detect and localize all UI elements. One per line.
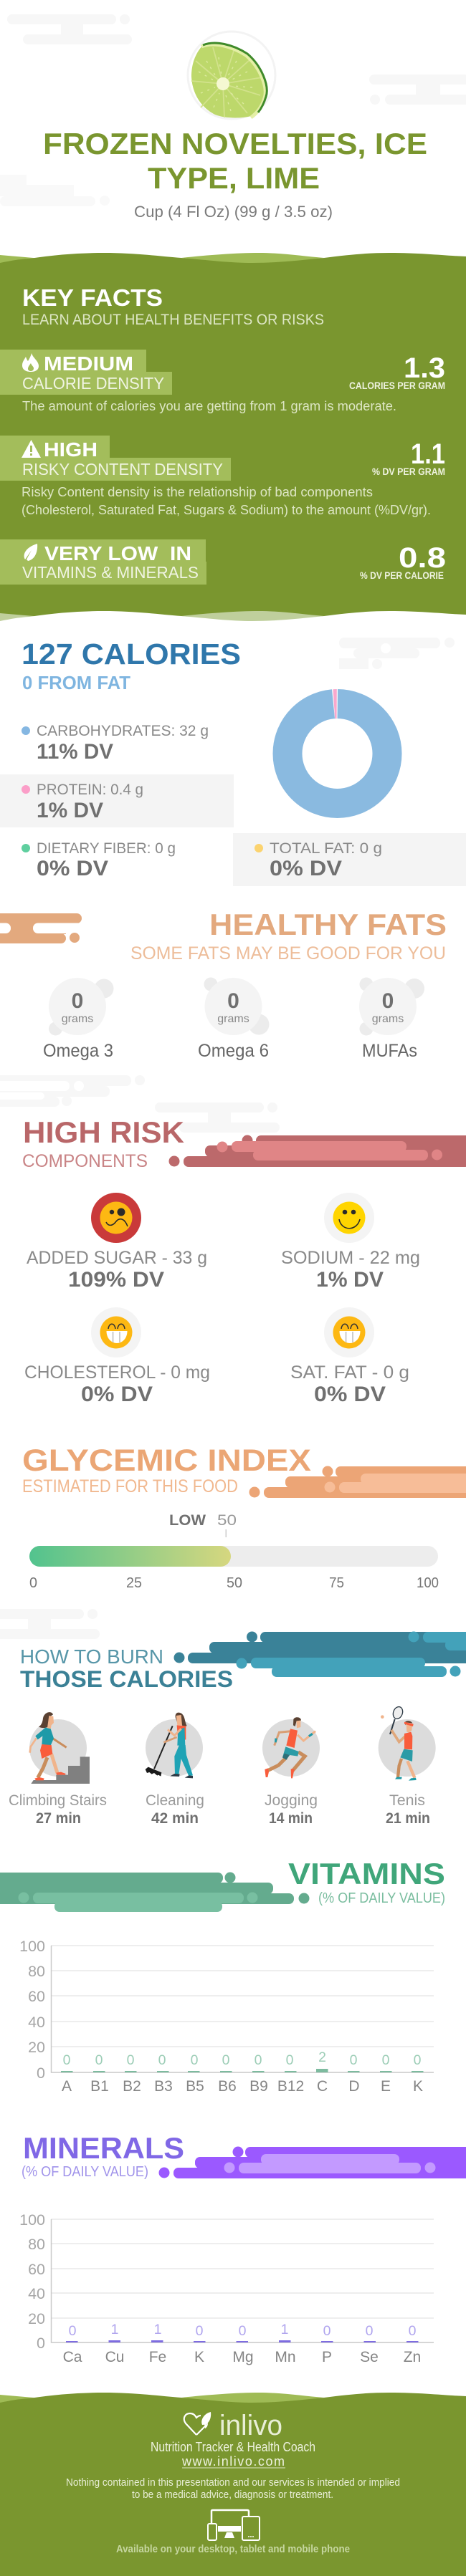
background cloud: calories [339,638,455,669]
risky content description: Risky Content density is the relationship of bad components [22,485,373,499]
bar values: 0 [222,2052,230,2068]
serving size: Cup (4 Fl Oz) (99 g / 3.5 oz) [134,203,333,221]
macro: total fat: 0% DV [270,857,342,880]
activity: cleaning: Cleaning [146,1792,204,1809]
y axis labels [19,1938,45,2082]
background cloud: top right [369,75,466,105]
fat: omega 3 [43,978,113,1061]
gauge label: 50 [217,1512,237,1529]
donut chart [287,689,387,804]
y axis labels [19,2211,45,2352]
calories heading: 127 CALORIES [22,638,241,671]
vitamins and minerals value: 0.8 [399,542,446,574]
y axis labels: 100 [19,1938,45,1955]
minerals subheading: (% OF DAILY VALUE) [22,2164,148,2180]
burn heading line 1: HOW TO BURN [20,1645,163,1668]
y axis labels: 20 [28,2310,45,2327]
title: FROZEN NOVELTIES, ICE [43,127,427,160]
y axis labels: 100 [19,2211,45,2229]
fat: mufas [359,977,424,1061]
x axis labels: B6 [218,2078,237,2095]
y axis labels: 40 [28,2285,45,2302]
fat: mufas: grams [372,1013,404,1025]
high label: HIGH [44,438,98,461]
gauge scale [29,1575,439,1591]
macro: protein [0,774,234,827]
vitamins and minerals badge [0,539,206,585]
fat: mufas: 0 [382,989,394,1013]
risky content value [372,438,445,477]
activity: climbing stairs: Climbing Stairs [9,1792,107,1809]
very low label: VERY LOW IN [44,542,191,564]
activity: jogging: Jogging [265,1792,318,1809]
vitamins and minerals value: % DV PER CALORIE [360,570,444,581]
macro: carbohydrates [22,723,209,764]
background cloud: top left [7,14,132,44]
website link: www.inlivo.com [181,2454,285,2469]
food image: lime slice [188,32,275,119]
vitamins and minerals value [360,542,446,581]
icon: flame [22,353,39,372]
x axis labels: B12 [277,2078,304,2095]
background clouds: high risk [0,1075,280,1133]
x axis labels: P [322,2349,332,2365]
gauge scale: 100 [417,1575,439,1591]
title [43,127,427,195]
calorie density label: CALORIE DENSITY [22,374,164,393]
fat: omega 3: grams [62,1013,93,1025]
logo wordmark: inlivo [219,2410,282,2441]
risk: sodium [281,1193,420,1292]
gauge label [169,1512,237,1537]
risky content description: (Cholesterol, Saturated Fat, Sugars & Sodium) to the amount (%DV/gr). [22,503,431,517]
icon: warning triangle [22,440,41,458]
bar values: 0 [69,2323,77,2339]
macro: dietary fiber [22,840,176,880]
vitamins heading: VITAMINS [288,1857,445,1890]
bar values: 1 [154,2322,161,2337]
bar values: 0 [255,2052,262,2068]
x axis labels: B9 [249,2078,268,2095]
burn heading line 2: THOSE CALORIES [20,1666,233,1692]
x axis labels: C [317,2078,328,2095]
availability note: Available on your desktop, tablet and mobile phone [116,2543,350,2555]
y axis labels: 60 [28,2261,45,2278]
x axis labels [62,2078,423,2095]
fat: omega 3: 0 [72,989,83,1013]
bar values: 0 [239,2323,247,2339]
icon: grinning face [333,1317,366,1348]
risk: added sugar: 109% DV [68,1268,164,1292]
x axis labels: Mg [232,2349,254,2365]
fat: omega 3: Omega 3 [43,1041,113,1061]
bar values: 0 [323,2323,331,2339]
macro: protein: PROTEIN: 0.4 g [37,782,143,798]
panel: footer [0,2393,466,2576]
bar values: 0 [196,2323,204,2339]
illustration: runner [262,1717,320,1778]
macro: carbohydrates: 11% DV [37,740,113,764]
illustration: tennis player [379,1706,436,1781]
macro: dietary fiber: DIETARY FIBER: 0 g [37,840,176,857]
fat: mufas: MUFAs [362,1041,417,1061]
calorie density value [349,352,445,391]
risky content value: 1.1 [411,438,445,470]
icon: grinning face [100,1317,132,1348]
x axis labels: Se [360,2349,379,2365]
bar values: 1 [281,2322,288,2337]
key facts heading: KEY FACTS [22,284,163,311]
x axis labels [63,2349,421,2365]
vitamins subheading: (% OF DAILY VALUE) [318,1890,445,1906]
x axis labels: B5 [186,2078,204,2095]
bar values: 0 [366,2323,374,2339]
vitamins and minerals label: VITAMINS & MINERALS [22,563,199,582]
illustration: woman on stairs [29,1712,90,1784]
x axis labels: Zn [404,2349,421,2365]
x axis labels: D [348,2078,360,2095]
x axis labels: K [413,2078,423,2095]
background cloud: burn calories [0,1609,100,1639]
risk: saturated fat [290,1307,409,1406]
x axis labels: Cu [105,2349,124,2365]
bar values: 0 [414,2052,422,2068]
bar values: 0 [95,2052,103,2068]
from fat subheading: 0 FROM FAT [22,672,130,693]
minerals bar chart [19,2211,434,2365]
healthy fats subheading: SOME FATS MAY BE GOOD FOR YOU [130,943,446,963]
risk: sodium: 1% DV [316,1268,384,1292]
risk: cholesterol [24,1307,210,1406]
gauge scale: 0 [29,1575,37,1591]
y axis labels: 80 [28,1963,45,1980]
risk: sodium: SODIUM - 22 mg [281,1248,420,1268]
risky content density badge [0,436,231,481]
vitamins bar chart [19,1938,434,2095]
fat: omega 6: grams [217,1013,249,1025]
x axis labels: B3 [154,2078,173,2095]
icon: leaf [24,544,37,561]
bar values [63,2049,422,2068]
glycemic gauge bar [29,1546,439,1591]
gauge scale: 50 [227,1575,242,1591]
bar values: 0 [286,2052,294,2068]
macro: protein: 1% DV [37,799,103,822]
calorie density description: The amount of calories you are getting from 1 gram is moderate. [22,399,396,413]
risk: saturated fat: 0% DV [314,1383,386,1406]
macro: carbohydrates: CARBOHYDRATES: 32 g [37,723,209,739]
y axis labels: 0 [37,2065,45,2082]
y axis labels: 0 [37,2335,45,2352]
calorie density value: CALORIES PER GRAM [349,380,445,391]
icon: worried face [100,1202,132,1234]
minerals heading: MINERALS [23,2131,184,2165]
gauge label: LOW [169,1512,206,1529]
bar values: 2 [318,2049,326,2065]
background cloud: left [0,175,110,206]
gauge scale: 25 [126,1575,142,1591]
activity: tennis [379,1706,436,1827]
decoration: vitamins [0,1873,310,1912]
y axis labels: 60 [28,1988,45,2005]
bar values: 0 [350,2052,358,2068]
activity: jogging [262,1717,320,1827]
bar values: 0 [158,2052,166,2068]
activity: climbing stairs: 27 min [36,1810,81,1827]
calorie density value: 1.3 [404,352,445,384]
calorie density badge [0,350,172,395]
high risk heading: HIGH RISK [23,1115,184,1149]
gauge scale: 75 [329,1575,344,1591]
fat: omega 6: Omega 6 [198,1041,269,1061]
bar values [69,2322,417,2339]
risk: saturated fat: SAT. FAT - 0 g [290,1363,409,1383]
bar values: 0 [63,2052,71,2068]
x axis labels: K [194,2349,204,2365]
illustration: woman sweeping [146,1713,203,1778]
macro: total fat: TOTAL FAT: 0 g [270,840,382,857]
title: TYPE, LIME [148,161,320,195]
tagline: Nutrition Tracker & Health Coach [151,2440,315,2454]
activity: tennis: 21 min [386,1810,430,1827]
risky content label: RISKY CONTENT DENSITY [22,460,223,479]
medium label: MEDIUM [44,352,133,375]
decoration: high risk [169,1135,466,1167]
bars [61,2069,423,2072]
macro: total fat [233,833,466,886]
risk: cholesterol: CHOLESTEROL - 0 mg [24,1363,210,1383]
bar values: 0 [382,2052,390,2068]
icon: devices [208,2510,260,2540]
logo: inlivo heart [184,2412,211,2435]
risky content value: % DV PER GRAM [372,466,445,477]
high risk subheading: COMPONENTS [22,1151,148,1171]
fat: omega 6: 0 [227,989,239,1013]
activity: cleaning: 42 min [151,1810,199,1827]
activity: cleaning [146,1713,204,1827]
x axis labels: B1 [90,2078,109,2095]
x axis labels: B2 [123,2078,141,2095]
y axis labels: 20 [28,2039,45,2056]
x axis labels: Ca [63,2349,82,2365]
glycemic index subheading: ESTIMATED FOR THIS FOOD [22,1476,238,1496]
panel: key facts [0,253,466,630]
healthy fats heading: HEALTHY FATS [209,908,447,941]
decoration: healthy fats [0,913,90,943]
y axis labels: 40 [28,2014,45,2031]
bar values: 0 [127,2052,135,2068]
risk: added sugar: ADDED SUGAR - 33 g [27,1248,207,1268]
x axis labels: Mn [275,2349,296,2365]
icon: smiling face [333,1202,366,1234]
bar values: 0 [409,2323,417,2339]
key facts subheading: LEARN ABOUT HEALTH BENEFITS OR RISKS [22,312,324,328]
x axis labels: A [62,2078,72,2095]
disclaimer: to be a medical advice, diagnosis or treatment. [132,2489,333,2501]
x axis labels: Fe [149,2349,166,2365]
macro: dietary fiber: 0% DV [37,857,108,880]
decoration: glycemic index [249,1466,466,1498]
disclaimer: Nothing contained in this presentation and our services is intended or implied [66,2476,400,2489]
activity: jogging: 14 min [269,1810,313,1827]
fat: omega 6 [198,977,270,1061]
activity: tennis: Tenis [389,1792,425,1809]
bar values: 1 [111,2322,118,2337]
glycemic index heading: GLYCEMIC INDEX [22,1443,311,1478]
x axis labels: E [381,2078,391,2095]
bar values: 0 [191,2052,199,2068]
decoration: burn calories [173,1632,466,1677]
disclaimer [66,2476,400,2501]
risky content description [22,485,431,517]
risk: added sugar [27,1193,207,1292]
y axis labels: 80 [28,2236,45,2253]
bars [66,2340,419,2342]
activity: climbing stairs [9,1712,107,1827]
risk: cholesterol: 0% DV [81,1383,153,1406]
decoration: minerals [159,2146,466,2178]
